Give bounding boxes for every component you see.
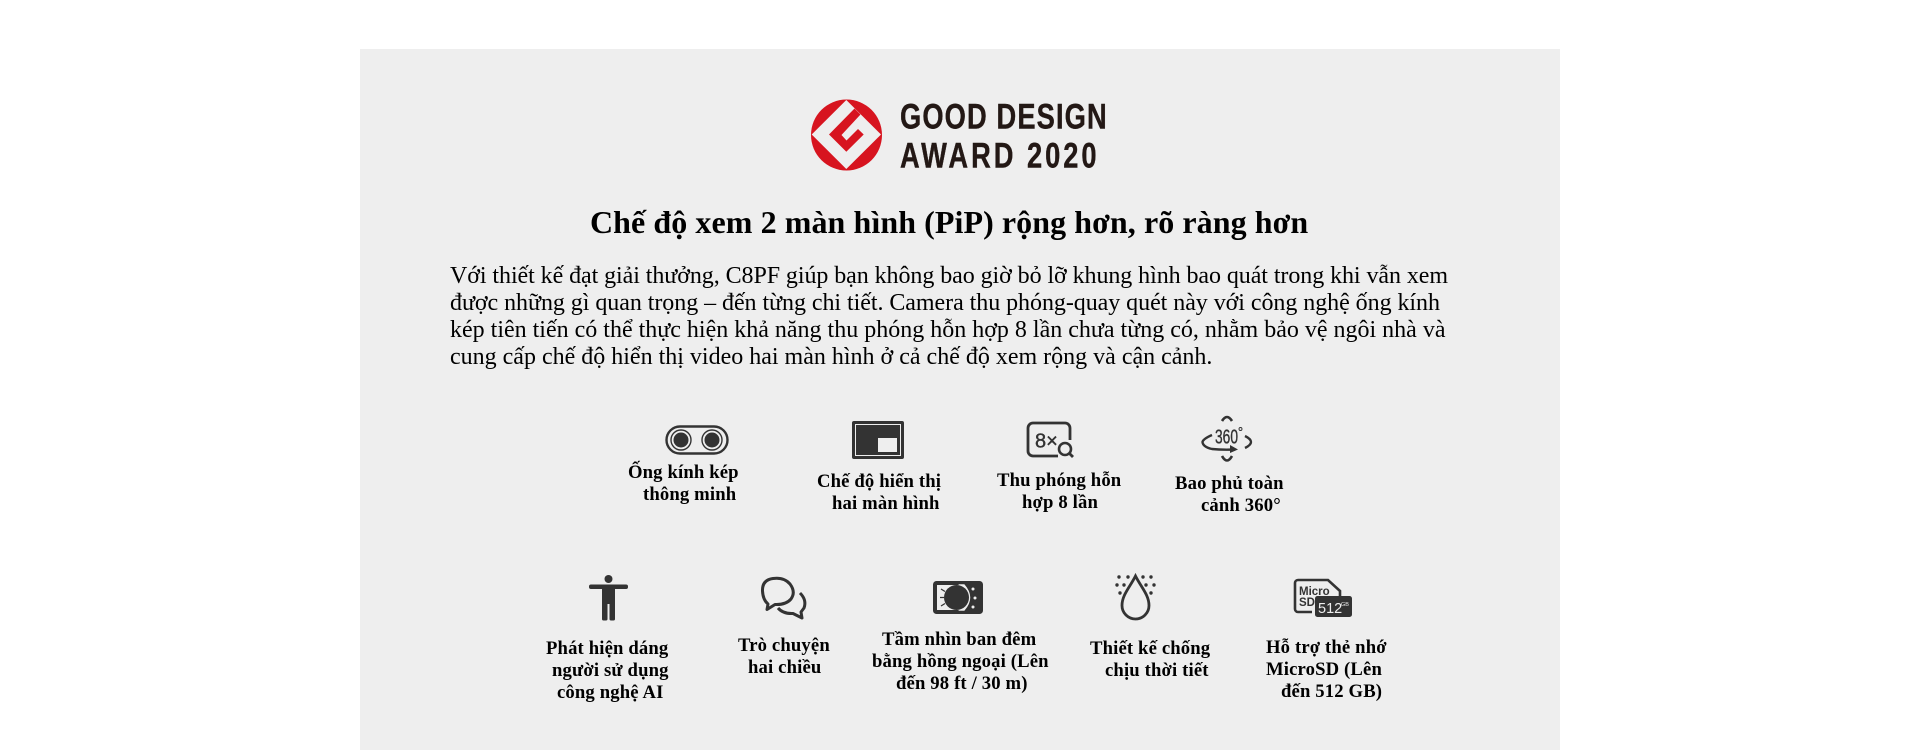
label: two-way talk: hai chiều <box>748 657 821 678</box>
icon: chat bubbles <box>760 576 806 620</box>
feature: microSD support <box>1266 578 1387 702</box>
label: dual screen <box>817 471 941 514</box>
icon: microSD card: SD <box>1299 597 1315 609</box>
text block: description <box>450 263 1448 370</box>
text block: description: Với thiết kế đạt giải thưởng, C8PF giúp bạn không bao giờ bỏ lỡ khung hình bao quát trong khi vẫn xem <box>450 263 1448 289</box>
label: AI human detection: Phát hiện dáng <box>546 638 668 659</box>
icon: 8x zoom: 8× <box>1035 430 1058 452</box>
icon: microSD card: GB <box>1341 602 1349 608</box>
label: infrared night vision <box>872 629 1049 694</box>
heading: Chế độ xem 2 màn hình (PiP) rộng hơn, rõ ràng hơn <box>590 204 1308 240</box>
label: weatherproof: Thiết kế chống <box>1090 638 1210 659</box>
icon: water drop <box>1115 573 1156 620</box>
label: hybrid zoom: Thu phóng hỗn <box>997 470 1121 491</box>
feature: dual screen <box>817 421 941 514</box>
feature: AI human detection <box>546 575 669 703</box>
icon: 360 rotation <box>1201 416 1252 462</box>
feature: two-way talk <box>738 576 830 678</box>
label: infrared night vision: đến 98 ft / 30 m) <box>896 673 1028 694</box>
label: microSD support: MicroSD (Lên <box>1266 659 1382 680</box>
text block: description: kép tiên tiến có thể thực hiện khả năng thu phóng hỗn hợp 8 lần chưa từng có, nhằm bảo vệ ngôi nhà và <box>450 317 1445 343</box>
label: infrared night vision: bằng hồng ngoại (Lên <box>872 651 1049 672</box>
feature: dual lens <box>628 425 739 505</box>
logo: Good Design Award 2020 <box>811 97 1107 175</box>
label: AI human detection: người sử dụng <box>552 660 669 681</box>
panel: grey background <box>360 49 1560 750</box>
label: AI human detection <box>546 638 669 703</box>
label: microSD support: Hỗ trợ thẻ nhớ <box>1266 637 1387 658</box>
label: hybrid zoom: hợp 8 lần <box>1022 492 1098 513</box>
icon: microSD card: Micro <box>1299 586 1330 598</box>
feature: hybrid zoom <box>997 422 1121 513</box>
icon: night vision <box>933 581 983 614</box>
label: infrared night vision: Tầm nhìn ban đêm <box>882 629 1036 650</box>
label: dual lens: thông minh <box>643 484 736 505</box>
text block: description: cung cấp chế độ hiển thị video hai màn hình ở cả chế độ xem rộng và cận cảnh. <box>450 344 1212 370</box>
label: AI human detection: công nghệ AI <box>557 682 664 703</box>
label: hybrid zoom <box>997 470 1121 513</box>
feature: infrared night vision <box>872 581 1049 694</box>
icon: dual lens <box>665 425 729 455</box>
icon: 8x zoom <box>1026 422 1074 458</box>
label: weatherproof <box>1090 638 1210 681</box>
label: weatherproof: chịu thời tiết <box>1105 660 1209 681</box>
label: microSD support: đến 512 GB) <box>1281 681 1382 702</box>
label: dual screen: hai màn hình <box>832 493 940 514</box>
logo: Good Design Award 2020: GOOD DESIGN <box>900 97 1107 136</box>
icon: 360 rotation: 360 <box>1215 426 1238 448</box>
icon: picture in picture <box>852 421 904 459</box>
icon: person <box>589 575 628 620</box>
label: dual screen: Chế độ hiển thị <box>817 471 941 492</box>
label: dual lens <box>628 460 739 505</box>
feature: weatherproof <box>1090 573 1210 681</box>
logo: Good Design Award 2020: AWARD 2020 <box>900 136 1097 175</box>
label: microSD support <box>1266 637 1387 702</box>
label: dual lens: Ống kính kép <box>628 462 739 483</box>
label: 360 coverage: Bao phủ toàn <box>1175 473 1284 494</box>
icon: microSD card <box>1294 578 1352 617</box>
label: 360 coverage <box>1175 473 1284 516</box>
text block: description: được những gì quan trọng – đến từng chi tiết. Camera thu phóng-quay quét này với công nghệ ống kính <box>450 290 1440 316</box>
icon: microSD card: 512 <box>1318 601 1342 617</box>
label: 360 coverage: cảnh 360° <box>1201 495 1281 516</box>
feature: 360 coverage <box>1175 416 1284 516</box>
label: two-way talk: Trò chuyện <box>738 635 830 656</box>
label: two-way talk <box>738 635 830 678</box>
